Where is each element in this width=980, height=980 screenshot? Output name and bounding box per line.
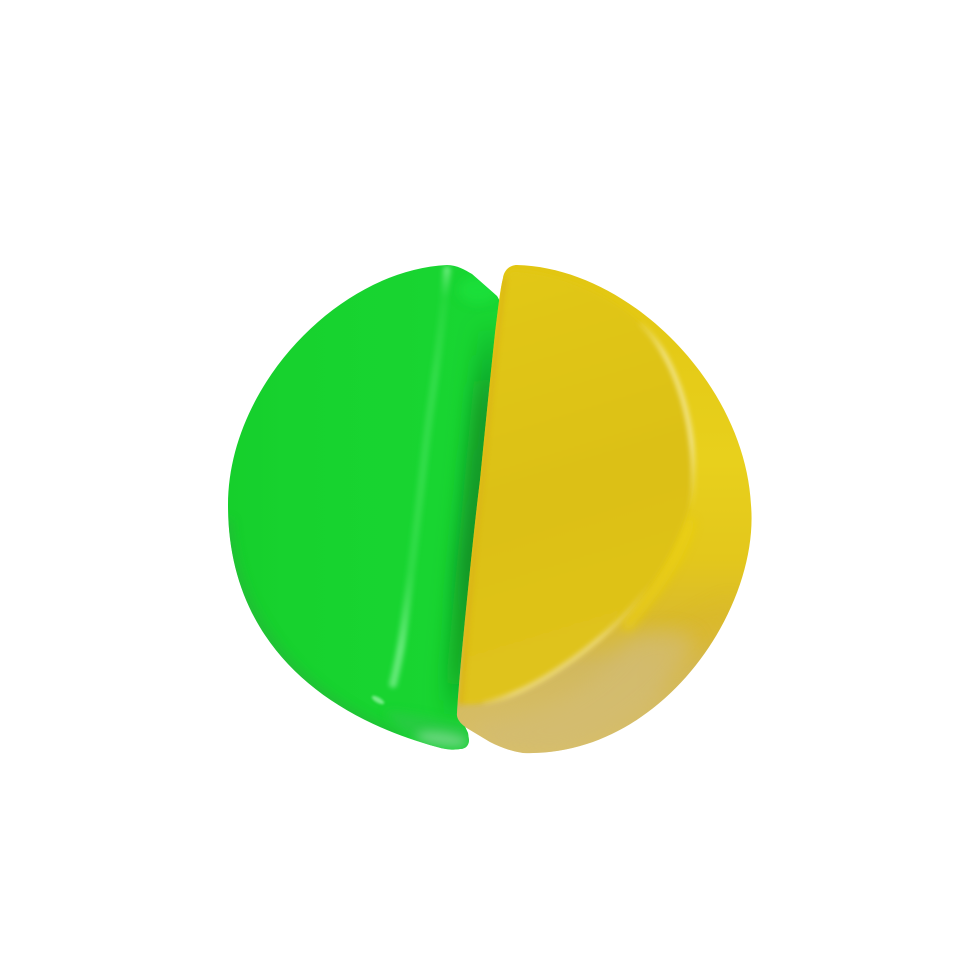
- 3D split pie chart icon: [228, 265, 752, 754]
- yellow half: [457, 265, 752, 755]
- green small corner highlight: [371, 694, 385, 706]
- yellow split edge shade: [461, 278, 505, 705]
- green dark band beside split: [458, 325, 494, 715]
- yellow face highlight lower: [484, 594, 643, 704]
- yellow face highlight upper: [640, 323, 693, 510]
- green top-right brightness: [465, 274, 498, 298]
- green bottom pale facet: [392, 713, 469, 750]
- yellow lower-right warm transition: [664, 608, 730, 695]
- yellow bright glow under face edge: [625, 520, 690, 628]
- green half: [226, 265, 501, 752]
- yellow front face: [458, 270, 693, 704]
- yellow pale lower reflection: [470, 632, 695, 755]
- green bottom tip light: [415, 728, 469, 750]
- green ridge highlight: [393, 270, 447, 684]
- green lower-left edge shading: [226, 520, 400, 738]
